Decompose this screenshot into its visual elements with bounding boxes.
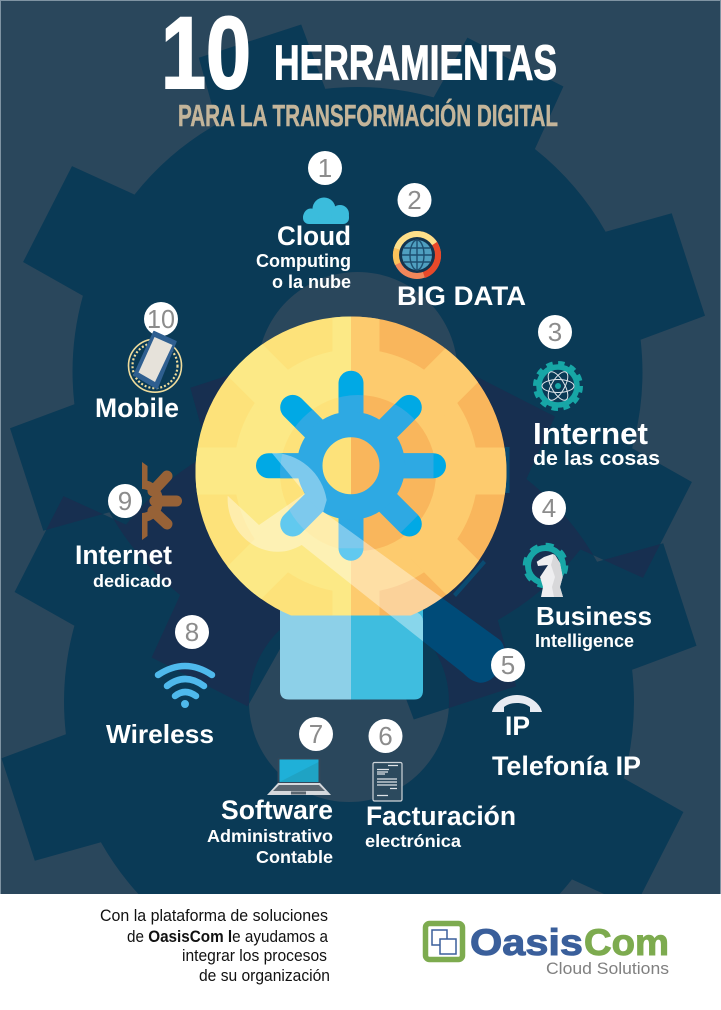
number 6 bbox=[368, 719, 402, 753]
label: internet: Internet bbox=[75, 540, 172, 570]
number 2: 2 bbox=[407, 185, 422, 215]
footer text: Con la plataforma de soluciones bbox=[100, 906, 328, 925]
item 2: big data bbox=[393, 183, 526, 311]
icon: half gear bbox=[142, 462, 182, 540]
footer text: de su organización bbox=[199, 966, 330, 985]
light gear inside bulb bbox=[196, 316, 506, 616]
number 1 bbox=[308, 151, 342, 185]
item 7: software bbox=[207, 717, 333, 867]
bulb glass bbox=[190, 310, 512, 620]
icon: invoice bbox=[373, 762, 402, 801]
label: business: Business bbox=[536, 601, 652, 631]
central light bulb illustration bbox=[196, 316, 510, 700]
wrench highlight over bulb bbox=[228, 452, 442, 642]
label: mobile: Mobile bbox=[95, 393, 179, 423]
number 4: 4 bbox=[542, 493, 556, 523]
label: administrativo: Administrativo bbox=[207, 826, 333, 846]
title: herramientas: HERRAMIENTAS bbox=[274, 36, 557, 90]
logo word oasis: Oasis bbox=[470, 922, 583, 963]
inner disc bbox=[280, 395, 436, 551]
number 3: 3 bbox=[548, 317, 562, 347]
item 9: internet dedicado bbox=[75, 462, 176, 591]
icon: smartphone bbox=[128, 332, 182, 392]
lamp base bbox=[280, 610, 423, 700]
number 7: 7 bbox=[309, 719, 323, 749]
number 6: 6 bbox=[378, 721, 393, 751]
footer panel bbox=[0, 894, 721, 1010]
item 3: internet de las cosas bbox=[533, 315, 660, 470]
label: intelligence: Intelligence bbox=[535, 631, 634, 651]
label: cloud: Cloud bbox=[277, 221, 351, 251]
number 5 bbox=[491, 648, 525, 682]
item 5: telefonia ip bbox=[491, 648, 641, 781]
label: ip: IP bbox=[505, 711, 530, 741]
number 8: 8 bbox=[185, 617, 199, 647]
footer text: de OasisCom le ayudamos a bbox=[127, 927, 328, 946]
bulb gear tips bbox=[453, 447, 510, 597]
number 4 bbox=[532, 491, 566, 525]
icon: wifi bbox=[158, 666, 212, 706]
label: big data: BIG DATA bbox=[397, 281, 526, 311]
number 3 bbox=[538, 315, 572, 349]
label: computing: Computing bbox=[256, 251, 351, 271]
icon: phone handset bbox=[492, 695, 542, 712]
label: electronica: electrónica bbox=[365, 831, 461, 851]
label: internet: Internet bbox=[533, 416, 648, 451]
icon: globe bbox=[393, 231, 441, 279]
number 10: 10 bbox=[147, 304, 175, 334]
wrench handle behind bulb bbox=[228, 453, 504, 683]
icon: cloud bbox=[303, 198, 349, 224]
logo: oasiscom bbox=[426, 922, 669, 978]
blue gear hub bbox=[280, 395, 434, 548]
label: o la nube: o la nube bbox=[272, 272, 351, 292]
item 1: cloud computing bbox=[256, 151, 351, 292]
icon: knight gear bbox=[525, 545, 566, 597]
number 5: 5 bbox=[501, 650, 515, 680]
icon: laptop bbox=[267, 758, 331, 795]
icon: atom gear bbox=[535, 363, 581, 409]
item 10: mobile bbox=[95, 302, 182, 423]
number 9: 9 bbox=[118, 486, 132, 516]
footer text bbox=[100, 906, 330, 985]
label: software: Software bbox=[221, 795, 333, 825]
blue gear bbox=[268, 383, 434, 548]
label: contable: Contable bbox=[256, 847, 333, 867]
item 4: business intelligence bbox=[525, 491, 652, 651]
label: wireless: Wireless bbox=[106, 719, 214, 749]
footer text: integrar los procesos bbox=[182, 946, 327, 965]
label: telefonia ip: Telefonía IP bbox=[492, 751, 641, 781]
item 6: facturacion electronica bbox=[365, 719, 516, 851]
item 8: wireless bbox=[106, 615, 214, 749]
label: facturacion: Facturación bbox=[366, 801, 516, 831]
logo mark bbox=[426, 924, 462, 960]
label: de las cosas: de las cosas bbox=[533, 448, 660, 470]
number 1: 1 bbox=[318, 153, 332, 183]
label: dedicado: dedicado bbox=[93, 571, 172, 591]
number 7 bbox=[299, 717, 333, 751]
logo word com: Com bbox=[584, 922, 669, 963]
logo tagline: Cloud Solutions bbox=[546, 959, 669, 978]
